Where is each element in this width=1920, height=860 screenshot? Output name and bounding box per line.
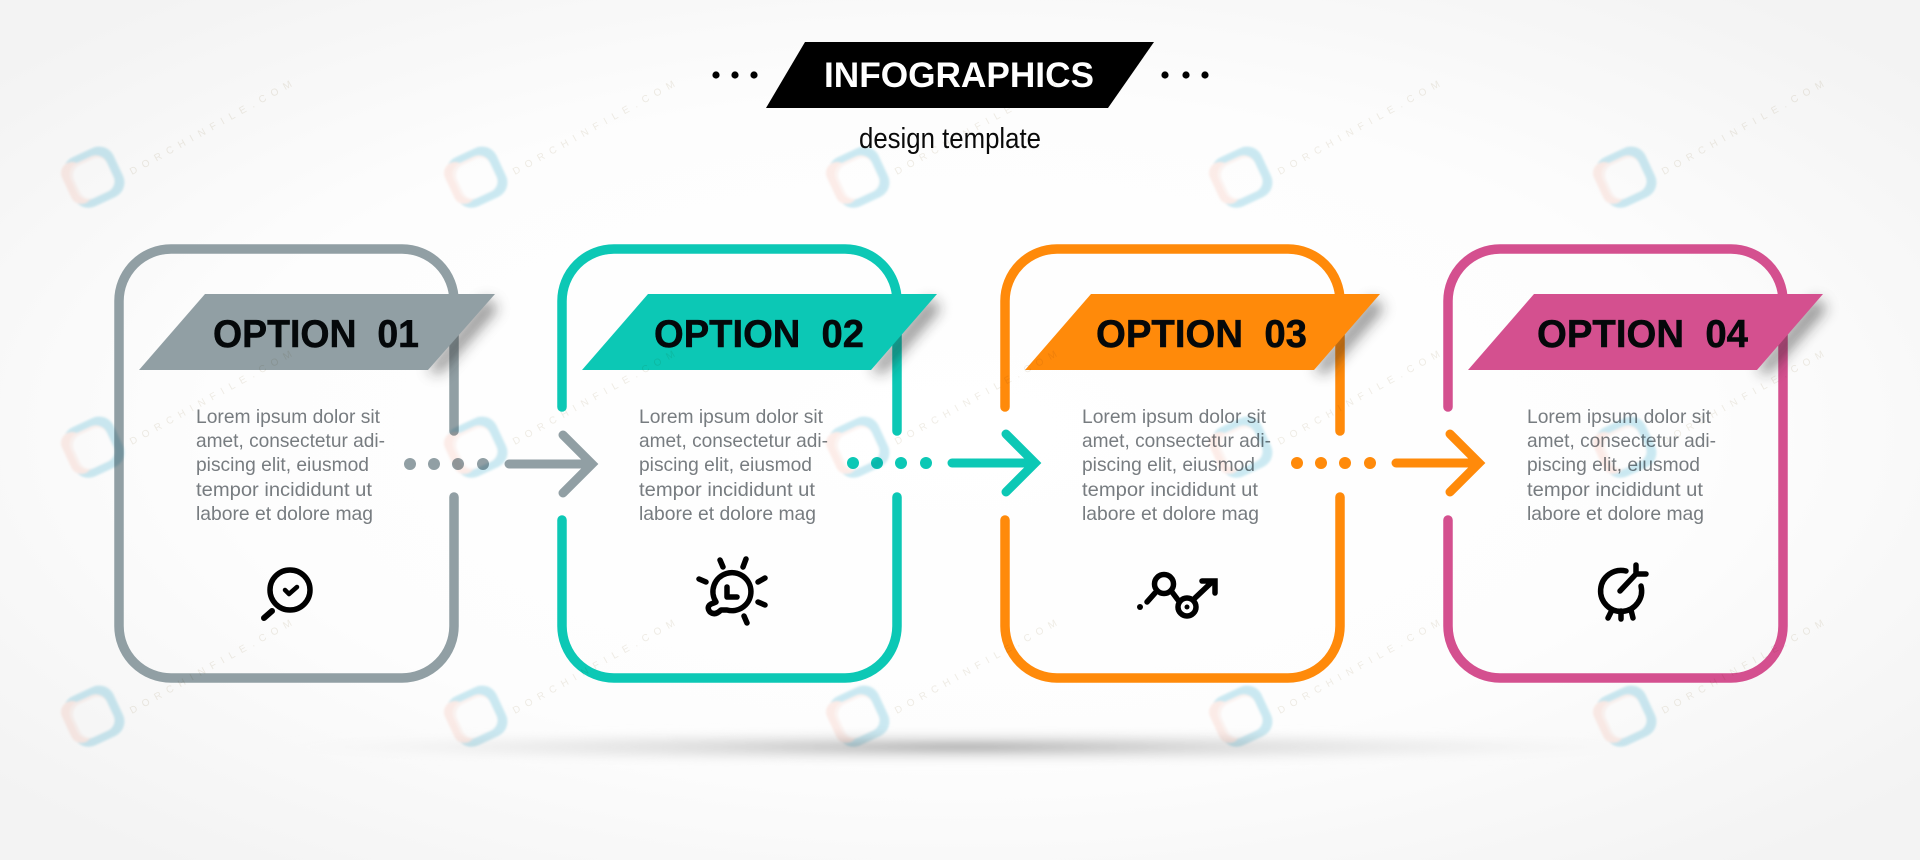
title banner: INFOGRAPHICS bbox=[824, 56, 1094, 95]
body text 03: labore et dolore mag bbox=[1082, 503, 1259, 525]
body text 03: piscing elit, eiusmod bbox=[1082, 454, 1255, 476]
ribbon 02 bbox=[582, 294, 937, 370]
body text 01: Lorem ipsum dolor sit bbox=[196, 406, 381, 428]
watermark: row 1 bbox=[56, 76, 1832, 214]
body text 02: tempor incididunt ut bbox=[639, 479, 816, 501]
heading 01: OPTION 01 bbox=[213, 313, 419, 356]
icon: target with dart bbox=[1601, 565, 1646, 619]
icon: magnifier with check bbox=[264, 570, 310, 618]
body text 01: amet, consectetur adi- bbox=[196, 430, 385, 452]
body text 01: tempor incididunt ut bbox=[196, 479, 373, 501]
subtitle: design template bbox=[859, 123, 1041, 155]
watermark: row 3: DORCHINFILE.COM bbox=[1660, 615, 1832, 717]
body text 04: amet, consectetur adi- bbox=[1527, 430, 1716, 452]
body text 03: amet, consectetur adi- bbox=[1082, 430, 1271, 452]
watermark: row 3: DORCHINFILE.COM bbox=[511, 615, 683, 717]
body text 01: labore et dolore mag bbox=[196, 503, 373, 525]
body text 04: labore et dolore mag bbox=[1527, 503, 1704, 525]
panel: option 01 bbox=[119, 249, 498, 678]
ribbon shadow 01 bbox=[428, 298, 498, 374]
watermark: row 2: DORCHINFILE.COM bbox=[511, 346, 683, 448]
floor shadow bbox=[265, 730, 1665, 764]
panel: option 04 bbox=[1448, 249, 1827, 678]
watermark: row 1: DORCHINFILE.COM bbox=[1660, 76, 1832, 178]
body text 01: piscing elit, eiusmod bbox=[196, 454, 369, 476]
card outline 01 bbox=[119, 249, 454, 678]
body text 04: tempor incididunt ut bbox=[1527, 479, 1704, 501]
body text 02: labore et dolore mag bbox=[639, 503, 816, 525]
watermark: row 1: DORCHINFILE.COM bbox=[128, 76, 300, 178]
panel: option 03 bbox=[1005, 249, 1384, 678]
body text 04: piscing elit, eiusmod bbox=[1527, 454, 1700, 476]
arrow: 02 to 03 bbox=[847, 434, 1035, 492]
icon: growth path arrow bbox=[1137, 574, 1215, 616]
body text 02: Lorem ipsum dolor sit bbox=[639, 406, 824, 428]
body text 04: Lorem ipsum dolor sit bbox=[1527, 406, 1712, 428]
watermark: row 2: DORCHINFILE.COM bbox=[128, 346, 300, 448]
right title dots bbox=[1161, 71, 1209, 79]
body text 02: amet, consectetur adi- bbox=[639, 430, 828, 452]
heading 03: OPTION 03 bbox=[1096, 313, 1307, 356]
ribbon shadow 02 bbox=[871, 298, 941, 374]
watermark: row 2 bbox=[56, 346, 1832, 484]
body text 02: piscing elit, eiusmod bbox=[639, 454, 812, 476]
heading 02: OPTION 02 bbox=[654, 313, 864, 356]
body text 03: tempor incididunt ut bbox=[1082, 479, 1259, 501]
card outline 02 bbox=[562, 249, 897, 678]
icon: idea bubble with clock bbox=[699, 559, 765, 623]
arrow: 03 to 04 bbox=[1291, 434, 1479, 492]
card outline 03 bbox=[1005, 249, 1340, 678]
body text 01 bbox=[196, 406, 385, 525]
heading 04: OPTION 04 bbox=[1537, 313, 1748, 356]
ribbon 01 bbox=[139, 294, 495, 370]
watermark: row 2: DORCHINFILE.COM bbox=[1660, 346, 1832, 448]
panel: option 02 bbox=[562, 249, 941, 678]
ribbon shadow 03 bbox=[1314, 298, 1384, 374]
watermark: row 3: DORCHINFILE.COM bbox=[893, 615, 1065, 717]
body text 03: Lorem ipsum dolor sit bbox=[1082, 406, 1267, 428]
title banner bbox=[766, 42, 1154, 108]
watermark: row 1: DORCHINFILE.COM bbox=[893, 76, 1065, 178]
watermark: row 3: DORCHINFILE.COM bbox=[128, 615, 300, 717]
watermark: row 2: DORCHINFILE.COM bbox=[1276, 346, 1448, 448]
watermark: row 3: DORCHINFILE.COM bbox=[1276, 615, 1448, 717]
watermark: row 1: DORCHINFILE.COM bbox=[1276, 76, 1448, 178]
body text 04 bbox=[1527, 406, 1716, 525]
ribbon shadow 04 bbox=[1757, 298, 1827, 374]
body text 02 bbox=[639, 406, 828, 525]
left title dots bbox=[712, 71, 758, 79]
ribbon 03 bbox=[1025, 294, 1380, 370]
watermark: row 2: DORCHINFILE.COM bbox=[893, 346, 1065, 448]
body text 03 bbox=[1082, 406, 1271, 525]
ribbon 04 bbox=[1468, 294, 1823, 370]
watermark overlay bbox=[56, 76, 1832, 753]
watermark: row 1: DORCHINFILE.COM bbox=[511, 76, 683, 178]
watermark: row 3 bbox=[56, 615, 1832, 753]
arrow: 01 to 02 bbox=[404, 435, 592, 493]
card outline 04 bbox=[1448, 249, 1783, 678]
